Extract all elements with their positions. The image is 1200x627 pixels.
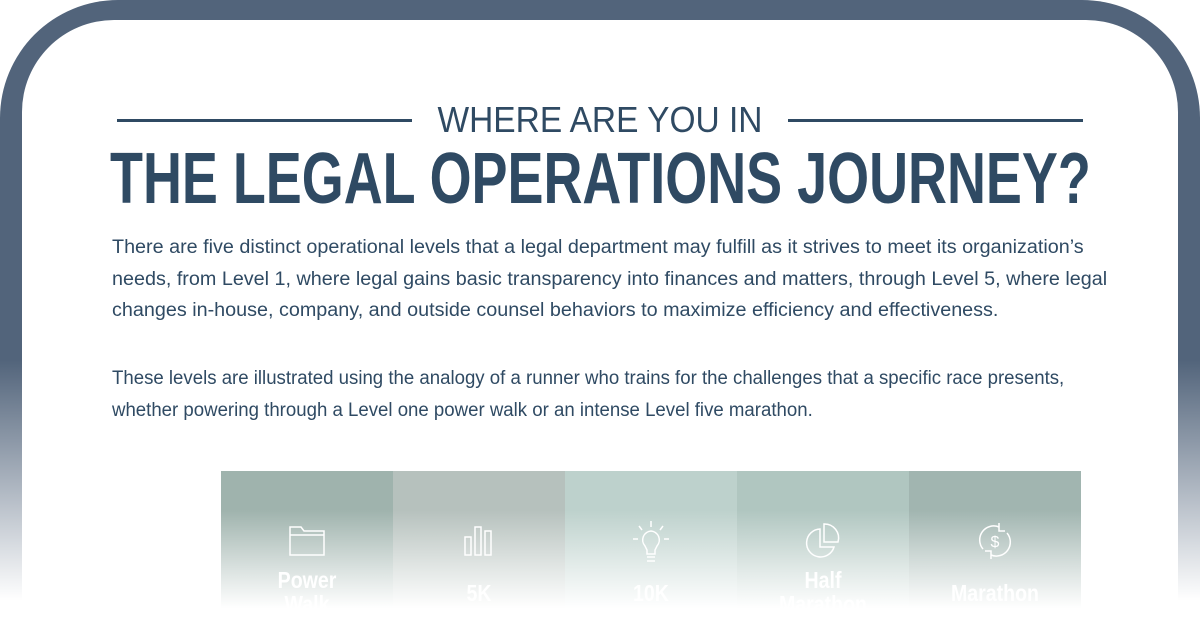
- column: marathon: Marathon: [951, 580, 1039, 606]
- heading line left: [117, 119, 412, 122]
- intro paragraph: needs, from Level 1, where legal gains basic transparency into finances and matters, through Level 5, where legal: [112, 268, 1107, 290]
- heading line right: [788, 119, 1083, 122]
- intro paragraph: changes in-house, company, and outside counsel behaviors to maximize efficiency and effectiveness.: [112, 300, 998, 321]
- column: half marathon: Half: [805, 567, 841, 593]
- column: power walk: Walk: [285, 591, 329, 617]
- analogy paragraph: These levels are illustrated using the analogy of a runner who trains for the challenges that a specific race presents,: [112, 368, 1064, 389]
- column: marathon: [909, 471, 1081, 627]
- analogy paragraph: whether powering through a Level one power walk or an intense Level five marathon.: [112, 400, 813, 420]
- intro paragraph: There are five distinct operational levels that a legal department may fulfill as it strives to meet its organization’s: [112, 237, 1084, 258]
- intro paragraph: [112, 237, 1107, 321]
- column: half marathon: [737, 471, 909, 627]
- icon: folder: [289, 526, 325, 556]
- column: 5k: [393, 471, 565, 627]
- column: 5k: 5K: [467, 580, 491, 606]
- levels table: [221, 471, 1081, 617]
- analogy paragraph: [112, 368, 1064, 420]
- column: 10k: [565, 471, 737, 627]
- icon: bar chart: [464, 526, 492, 556]
- title: THE LEGAL OPERATIONS JOURNEY?: [110, 139, 1091, 219]
- column: power walk: Power: [278, 567, 336, 593]
- icon: dollar cycle: $: [991, 534, 1000, 551]
- column: power walk: [221, 471, 393, 627]
- subtitle: WHERE ARE YOU IN: [438, 99, 762, 140]
- icon: lightbulb: [633, 521, 669, 562]
- icon: dollar cycle: [979, 523, 1011, 559]
- column: half marathon: Marathon: [779, 591, 867, 617]
- icon: pie chart: [806, 523, 840, 558]
- column: 10k: 10K: [633, 580, 669, 606]
